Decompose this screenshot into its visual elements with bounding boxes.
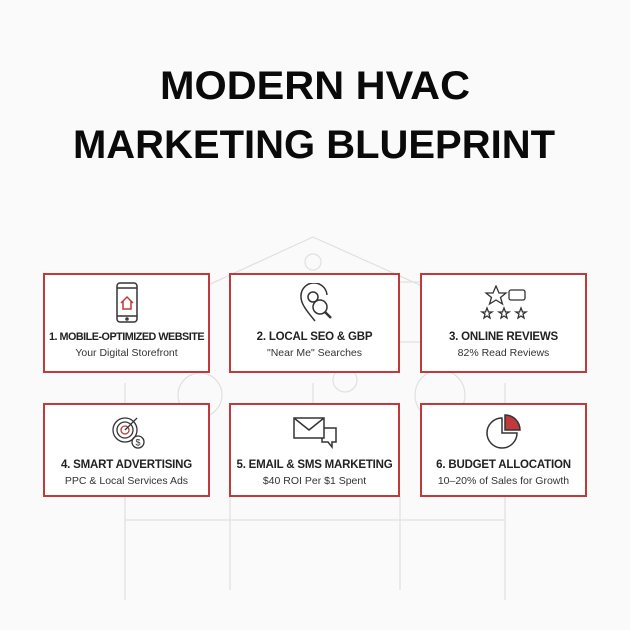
- panel: local seo: 2. LOCAL SEO & GBP: [257, 331, 372, 343]
- icon: envelope and chat: [293, 417, 337, 449]
- panel: budget: 6. BUDGET ALLOCATION: [436, 459, 571, 471]
- title: [73, 64, 555, 167]
- panel: reviews: 3. ONLINE REVIEWS: [449, 331, 558, 343]
- panel: mobile website: [43, 273, 210, 373]
- panel: local seo: "Near Me" Searches: [267, 347, 362, 359]
- panel: mobile website: Your Digital Storefront: [75, 347, 178, 359]
- panel: budget: 10–20% of Sales for Growth: [438, 475, 569, 487]
- title: MARKETING BLUEPRINT: [73, 123, 555, 167]
- panel: mobile website: 1. MOBILE-OPTIMIZED WEBSITE: [49, 331, 204, 343]
- panel: smart advertising: 4. SMART ADVERTISING: [61, 459, 192, 471]
- panel: email & sms: [229, 403, 400, 497]
- icon: target with dollar: [112, 417, 145, 449]
- panel: email & sms: $40 ROI Per $1 Spent: [263, 475, 366, 487]
- title: MODERN HVAC: [160, 64, 470, 108]
- icon: map pin with magnifier: [300, 283, 332, 322]
- icon: phone with house: [116, 282, 138, 323]
- panel: email & sms: 5. EMAIL & SMS MARKETING: [236, 459, 392, 471]
- icon: stars and chat: [480, 285, 528, 320]
- panel: smart advertising: PPC & Local Services Ads: [65, 475, 188, 487]
- icon: pie chart: [486, 414, 521, 449]
- panel: smart advertising: [43, 403, 210, 497]
- panel: reviews: [420, 273, 587, 373]
- icon: target with dollar: $: [135, 438, 140, 448]
- panel: reviews: 82% Read Reviews: [458, 347, 549, 359]
- panel: local seo: [229, 273, 400, 373]
- panel: budget: [420, 403, 587, 497]
